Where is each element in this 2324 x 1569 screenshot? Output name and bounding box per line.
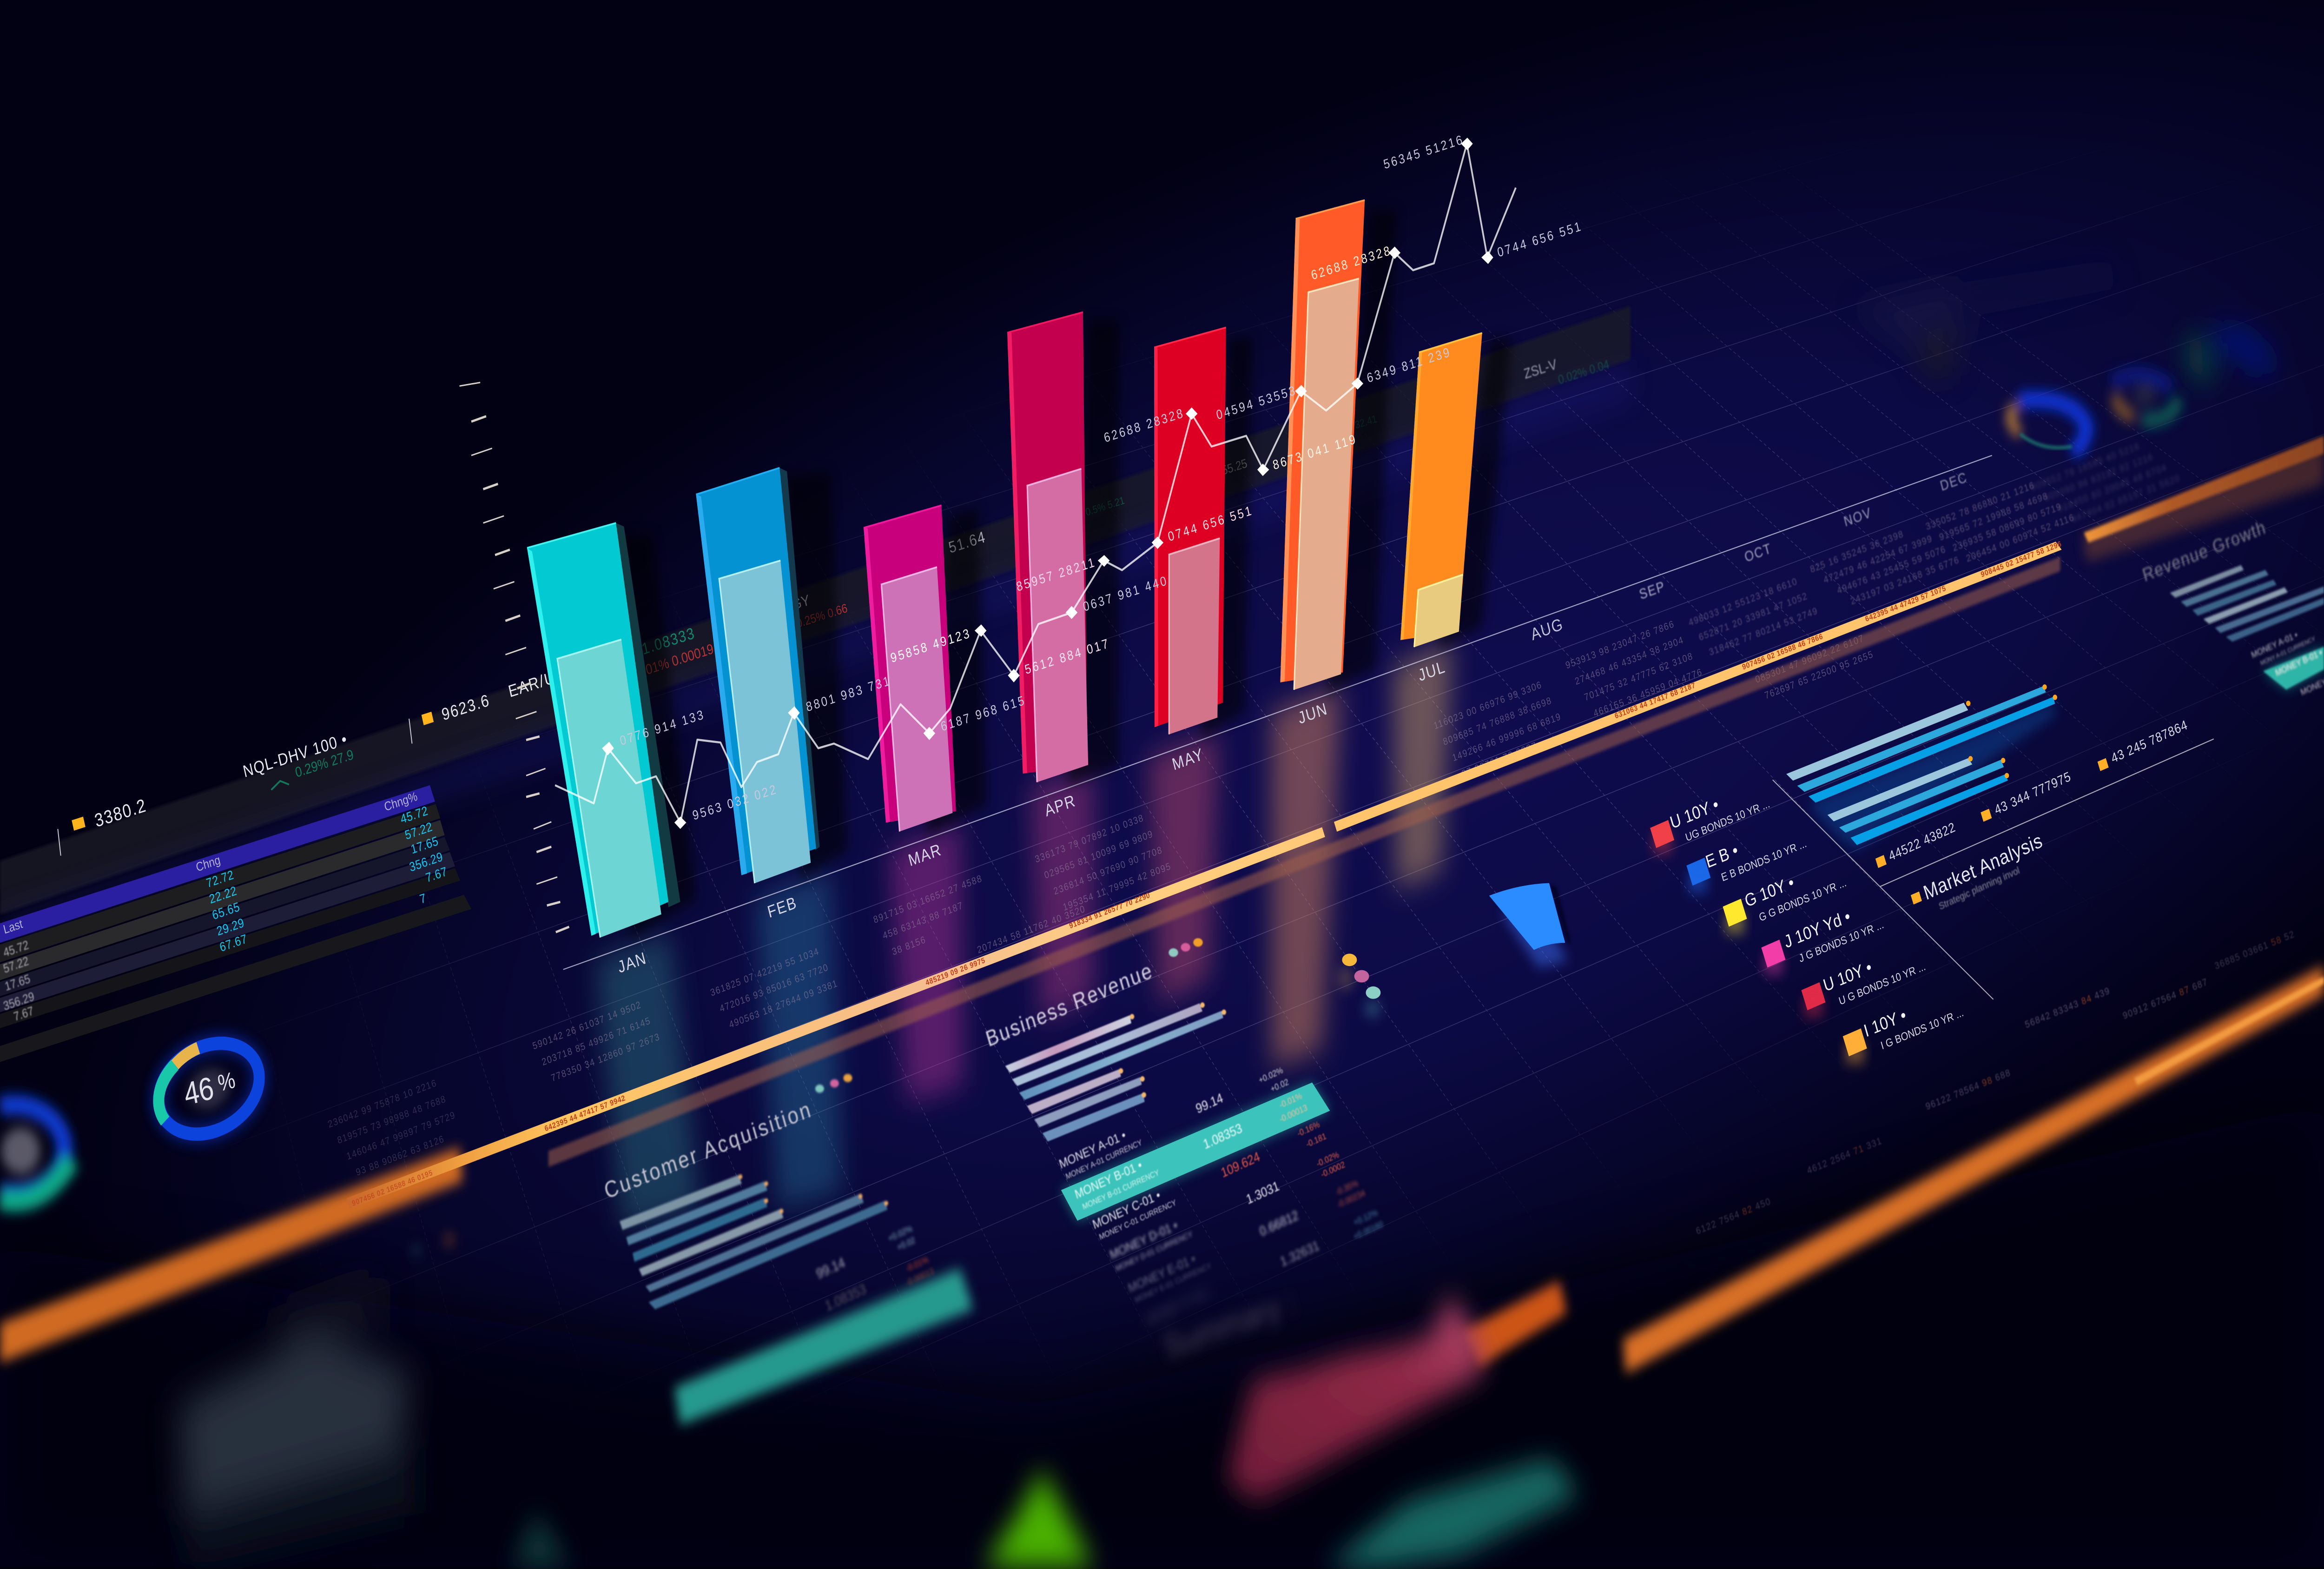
line value labels: 0637 981 440 [1082, 573, 1169, 614]
number tables on floor: 905090 96 83192 92 1216 [2043, 451, 2154, 504]
panel: market analysis [1773, 684, 2214, 1000]
legend item 2: E B BONDS 10 YR ... [1720, 837, 1808, 884]
number tables on floor: 56842 83343 84 439 [2024, 985, 2112, 1031]
line markers [602, 138, 1493, 829]
ticker text: 3380.2 [93, 794, 148, 831]
panel: business revenue: -0.35% [1334, 1178, 1360, 1197]
ticker text: 55.25 [1221, 457, 1248, 478]
band numbers [351, 540, 2063, 1208]
currency rows: -0.181 [1305, 1131, 1327, 1149]
donut 1 [2011, 399, 2087, 452]
number tables on floor: 825 16 35245 36 2398 [1809, 528, 1905, 575]
blurred green shape [984, 1470, 1094, 1567]
number tables on floor: 236935 58 08699 80 5719 [1952, 501, 2063, 554]
table values: 29.29 [215, 916, 246, 939]
number tables on floor: 778350 34 12860 97 2673 [550, 1031, 661, 1084]
number tables on floor: 947404 02 65157 31 5620 [2070, 472, 2181, 525]
panel: business revenue [983, 938, 1385, 1366]
panel: business revenue: MONEY E-01 • [1127, 1252, 1197, 1296]
panel: customer acquisition [601, 1074, 935, 1314]
band numbers: 631063 44 17417 68 2187 [1614, 681, 1697, 721]
band numbers: 907456 02 16588 46 7866 [1741, 632, 1824, 672]
band numbers: 908445 02 15477 58 1296 [1980, 540, 2063, 579]
line value labels: 0744 656 551 [1496, 218, 1584, 260]
number tables on floor: 335052 78 86880 21 1216 [1925, 480, 2036, 532]
month labels: JUN [1296, 700, 1329, 728]
number tables on floor: 195354 11 79995 42 8095 [1062, 861, 1172, 913]
bar: JUN [1280, 200, 1365, 690]
month labels: SEP [1637, 578, 1667, 602]
month labels [616, 469, 1969, 977]
table values: 356.29 [2, 990, 36, 1013]
table values: 45.72 [399, 804, 429, 827]
series labels: 43 245 787864 [2109, 717, 2189, 766]
number tables on floor: 472479 46 42254 67 3999 [1822, 533, 1934, 586]
blurred upper right donuts [2011, 338, 2265, 452]
ticker text: 0.29% 27.9 [294, 746, 355, 780]
legend item 6 [1843, 1005, 1965, 1064]
values: -0.00013 [905, 1266, 935, 1288]
number tables on floor: 90912 67564 87 687 [2122, 976, 2209, 1022]
table header: Chng [195, 853, 222, 874]
ticker text: 0.01% 0.00019 [634, 640, 715, 681]
ticker text [58, 356, 1611, 856]
donut 2 [2112, 375, 2179, 420]
blue wedge [1489, 883, 1571, 968]
heading: Strategic planning invol [1938, 865, 2021, 912]
line value labels: 9563 032 022 [691, 781, 779, 823]
band numbers: 918334 91 26577 70 2290 [1069, 891, 1151, 931]
table values: 57.22 [2, 954, 30, 976]
bar chart [527, 200, 1512, 939]
ticker text: 0.02% 0.04 [1557, 357, 1611, 387]
month labels: AUG [1529, 615, 1565, 644]
number tables on floor: 819575 73 98988 48 7688 [336, 1093, 448, 1146]
panel: business revenue: MONEY D-01 • [1108, 1218, 1179, 1262]
legend item 5: U 10Y • [1821, 957, 1874, 996]
number tables on floor: 918450 80 20045 48 6704 [2057, 462, 2168, 515]
currency rows [2250, 629, 2324, 697]
y axis ticks [460, 383, 569, 932]
line value labels: 0776 914 133 [618, 707, 706, 748]
number tables on floor: 318462 77 80214 53 2749 [1708, 605, 1819, 658]
currency rows: -0.00013 [1278, 1102, 1308, 1125]
line value labels: 62688 28328 [1103, 405, 1186, 445]
panel: business revenue: MONEY F-01 • [1144, 1284, 1215, 1328]
heading: Customer Acquisition [601, 1096, 815, 1204]
blurred upper right panel [1853, 260, 2119, 381]
currency rows: MONEY B-01 • [1073, 1158, 1144, 1202]
donut: blurred left [0, 1105, 71, 1201]
number tables on floor: 93 88 90862 63 8126 [355, 1133, 446, 1178]
series labels: 43 344 777975 [1993, 768, 2073, 818]
bar: JAN [527, 523, 680, 938]
line value labels [618, 132, 1584, 823]
number tables on floor: 146046 47 99897 79 5729 [345, 1109, 457, 1162]
currency rows: +0.02 [1269, 1077, 1290, 1094]
number tables on floor: 494676 43 25455 59 5076 [1836, 543, 1947, 596]
values: -0.01% [905, 1254, 930, 1274]
legend item 4: J G BONDS 10 YR ... [1797, 918, 1885, 965]
series labels: 44522 43822 [1887, 819, 1957, 864]
legend item 1 [1650, 794, 1771, 854]
month labels: JUL [1416, 658, 1447, 685]
currency rows: MONEY C-01 CURRENCY [1098, 1198, 1177, 1242]
perspective grid [291, 182, 2324, 1366]
currency rows: MONEY A-01 CURRENCY [1064, 1138, 1143, 1181]
number tables on floor: 085301 47 96092 22 6107 [1754, 633, 1865, 686]
legend item 6: I G BONDS 10 YR ... [1879, 1006, 1965, 1052]
panel: business revenue: MONEY D-01 CURRENCY [1115, 1230, 1194, 1273]
panel: business revenue: +0.12% [1352, 1207, 1379, 1228]
table values: 7.67 [424, 864, 449, 885]
table header: Last [2, 917, 24, 937]
blurred teal band [1327, 1459, 1580, 1567]
legend item 3: G 10Y • [1743, 873, 1796, 911]
legend item 2 [1686, 837, 1808, 893]
currency rows: MONEY B-01 CURRENCY [1081, 1168, 1160, 1212]
currency rows: 99.14 [1194, 1090, 1225, 1116]
number tables on floor: 701475 32 47775 62 3108 [1583, 650, 1694, 703]
blurred bottom teal [511, 1512, 571, 1567]
ticker text: 0.2% 32.41 [1332, 413, 1378, 438]
currency rows: MONEY A-01 • [2250, 629, 2299, 660]
divider lines [1773, 739, 2214, 1000]
legend item 6: I 10Y • [1862, 1005, 1908, 1041]
line value labels: 8801 983 731 [805, 673, 892, 715]
ticker text: GY [790, 592, 811, 614]
line value labels: 62688 28328 [1310, 242, 1393, 283]
number tables on floor: 498033 12 55123 18 6610 [1687, 576, 1799, 629]
number tables on floor: 472016 93 85016 63 7720 [719, 962, 830, 1014]
number tables on floor: 919565 72 19988 58 4698 [1938, 490, 2049, 543]
currency rows: +0.02% [1257, 1065, 1284, 1085]
blurred bottom left panel [178, 1274, 415, 1567]
blurred orange area tip [1459, 1281, 1567, 1366]
legend item 1: U 10Y • [1668, 794, 1721, 833]
band numbers: 642395 44 47429 57 1075 [1864, 584, 1947, 624]
number tables on floor: 652871 20 33981 47 1052 [1697, 590, 1809, 643]
ticker text: 1.08333 [640, 623, 697, 658]
table values: 7 [418, 891, 428, 907]
panel: business revenue: +0.00160 [1352, 1219, 1385, 1242]
legend item 5: U G BONDS 10 YR ... [1837, 960, 1927, 1007]
month labels: OCT [1743, 540, 1773, 565]
ticker text: 0.5% 5.21 [1084, 495, 1126, 518]
number tables on floor: 236814 50 97690 90 7708 [1052, 844, 1164, 897]
ticker text: 0.25% 0.66 [795, 602, 849, 631]
shadows [622, 210, 1512, 939]
panel: business revenue: 1.32631 [1279, 1238, 1321, 1270]
number tables on floor: 4612 2564 71 331 [1806, 1135, 1883, 1177]
number tables on floor: 38 8156 [891, 934, 927, 958]
table header [0, 785, 435, 943]
table values: 22.22 [208, 884, 238, 907]
number tables on floor: 490563 18 27644 09 3381 [728, 978, 839, 1031]
number tables on floor: 116023 00 66976 99 3306 [1433, 679, 1543, 732]
number tables on floor: 909552 78 16585 40 5216 [2030, 441, 2141, 493]
legend item 4 [1761, 907, 1885, 975]
bar: MAR [864, 505, 956, 832]
legend item 1: UG BONDS 10 YR ... [1684, 797, 1771, 844]
values: +0.02 [896, 1235, 916, 1252]
currency rows: 109.624 [1219, 1149, 1262, 1180]
currency rows: -0.0002 [1320, 1159, 1346, 1179]
blurred area chart [1227, 1295, 1482, 1502]
table values: 65.65 [211, 900, 241, 923]
month labels: NOV [1842, 504, 1873, 530]
line value labels: 6187 968 615 [939, 692, 1027, 734]
bars [1005, 1002, 1226, 1141]
line value labels: 95858 49123 [889, 625, 972, 666]
bars [620, 1174, 888, 1309]
legend dots [815, 1074, 852, 1093]
number tables on floor: 36885 03661 58 52 [2213, 928, 2296, 972]
currency rows: -0.02% [1315, 1149, 1340, 1169]
values: 99.14 [814, 1254, 847, 1282]
panel: business revenue: MONEY E-01 CURRENCY [1134, 1261, 1213, 1305]
band numbers: 907456 02 16588 46 0195 [351, 1168, 434, 1208]
legend item 2: E B • [1703, 841, 1740, 872]
month labels: FEB [766, 894, 799, 922]
donut: 46 percent: 46 [181, 1070, 217, 1112]
ticker text: 51.64 [947, 527, 987, 556]
band numbers: 485219 09 26 9975 [924, 956, 986, 987]
currency rows: MONEY C-01 • [1091, 1188, 1162, 1232]
bars [2170, 565, 2324, 642]
number tables on floor: 27 00761 72 9237 [1460, 740, 1538, 780]
donut 3 [2195, 338, 2265, 374]
table values: 17.65 [4, 972, 32, 994]
line value labels: 0744 656 551 [1167, 503, 1254, 544]
values [814, 1223, 935, 1314]
bar: APR [1007, 312, 1088, 782]
number tables on floor: 6122 7564 82 450 [1695, 1196, 1772, 1237]
heading: Business Revenue [983, 958, 1155, 1052]
number tables on floor: 236042 99 75878 10 2216 [327, 1078, 438, 1130]
number tables on floor: 336173 79 07892 10 0338 [1034, 812, 1145, 865]
table header: Chng% [383, 790, 419, 814]
number tables on floor: 96122 78564 98 688 [1924, 1067, 2012, 1112]
ticker text: NQL-DHV 100 • [241, 730, 349, 781]
number tables on floor: 762697 65 22500 95 2655 [1763, 649, 1875, 702]
bar reflections [596, 641, 1452, 1227]
legend item 5 [1801, 957, 1927, 1018]
table values [2, 804, 449, 1024]
line value labels: 8673 041 119 [1271, 431, 1358, 473]
number tables on floor: 206454 00 60974 52 4116 [1965, 512, 2076, 564]
bar: FEB [696, 468, 819, 883]
currency rows: MONEY A-01 • [1057, 1128, 1128, 1172]
currency rows: MONEY B-01 • [2274, 647, 2323, 678]
blurred right panel: revenue growth [2140, 516, 2324, 697]
number tables on floor: 466155 36 45959 04 4776 [1592, 667, 1703, 719]
number tables on floor: 029565 81 10099 69 9809 [1043, 828, 1155, 881]
number tables on floor: 207434 58 11762 40 3520 [976, 903, 1087, 956]
month labels: APR [1043, 791, 1077, 821]
number tables on floor: 458 63143 88 7187 [882, 900, 964, 942]
table values: 72.72 [205, 867, 235, 891]
panel: business revenue: 0.66812 [1258, 1207, 1300, 1239]
number tables on floor: 953913 98 23047 26 7866 [1565, 618, 1676, 671]
currency rows [1057, 1065, 1346, 1242]
month labels: MAR [906, 841, 944, 870]
table values: 45.72 [2, 938, 30, 960]
shelf band: main orange light line [0, 540, 2063, 1363]
line value labels: 56345 51216 [1382, 132, 1465, 172]
panel: market table [0, 785, 471, 1062]
number tables on floor: 809685 74 76888 38 6698 [1442, 695, 1553, 748]
values: +0.02% [887, 1223, 914, 1244]
x axis line [563, 456, 1992, 969]
legend item 4: J 10Y Yd • [1782, 907, 1853, 952]
panel: business revenue: Summary : [1160, 1282, 1299, 1366]
customer highlight row [674, 1268, 973, 1425]
number tables on floor: 203718 85 49926 71 6145 [541, 1015, 652, 1068]
month labels: DEC [1938, 469, 1969, 494]
number tables on floor: 590142 26 61037 14 9502 [531, 999, 643, 1052]
shelf band: upper right [2082, 436, 2324, 562]
line chart [555, 132, 1584, 829]
band numbers: 642395 44 47417 57 9942 [544, 1094, 627, 1133]
number tables on floor: 243197 03 24168 35 6776 [1849, 554, 1961, 607]
number tables on floor: 274468 46 43354 38 2904 [1574, 635, 1685, 687]
donut: 46 percent: % [211, 1067, 237, 1098]
line value labels: 6349 811 239 [1366, 344, 1452, 385]
currency rows: -0.16% [1296, 1119, 1321, 1139]
number tables on floor [327, 430, 2296, 1237]
number tables on floor: 361825 07 42219 55 1034 [709, 946, 820, 999]
values: 1.08353 [823, 1280, 868, 1314]
ticker text: EAR/USD [507, 662, 578, 701]
line value labels: 85957 28211 [1015, 554, 1097, 594]
currency rows: MONY A-01 CURRENCY [2259, 635, 2316, 667]
table values: 356.29 [408, 850, 444, 874]
line value labels: 5612 884 017 [1023, 636, 1111, 677]
legend: bonds [1650, 794, 1965, 1064]
table values: 17.65 [409, 834, 440, 857]
ticker text: 9623.6 [440, 691, 492, 724]
legend dots [1169, 938, 1203, 957]
dark lower vignette [0, 1103, 2324, 1567]
line value labels: 04594 53553 [1215, 382, 1298, 423]
number tables on floor: 149266 46 99996 68 6819 [1451, 711, 1562, 764]
series labels [1875, 717, 2189, 868]
table values: 7.67 [13, 1004, 35, 1024]
legend item 3: G G BONDS 10 YR ... [1757, 876, 1848, 924]
bar: MAY [1154, 327, 1226, 735]
currency rows: 1.08353 [1202, 1120, 1244, 1152]
currency rows: -0.01% [1278, 1091, 1303, 1110]
bar: JUL [1400, 333, 1482, 647]
legend item 3 [1723, 873, 1848, 934]
panel: business revenue: -0.00234 [1336, 1188, 1367, 1210]
table values: 67.67 [218, 932, 249, 954]
heading: Market Analysis [1921, 828, 2045, 904]
upper scatter dots [1337, 953, 1381, 1018]
heading: Revenue Growth [2140, 516, 2268, 586]
horizontal blue bars [1786, 684, 2057, 850]
highlight row [1061, 1082, 1330, 1221]
table rows [0, 804, 471, 1062]
month labels: MAY [1170, 745, 1206, 774]
number tables on floor: 891715 03 16652 27 4588 [872, 873, 984, 926]
blurred panel dots [412, 1233, 455, 1256]
table values: 57.22 [403, 820, 434, 842]
shelf band: lower right [1623, 966, 2324, 1373]
ticker text: ZSL-V [1522, 356, 1558, 382]
ticker band [0, 306, 1631, 947]
month labels: JAN [616, 949, 648, 977]
donut: 46 percent [148, 1027, 270, 1150]
currency rows: 1.3031 [1244, 1178, 1281, 1207]
